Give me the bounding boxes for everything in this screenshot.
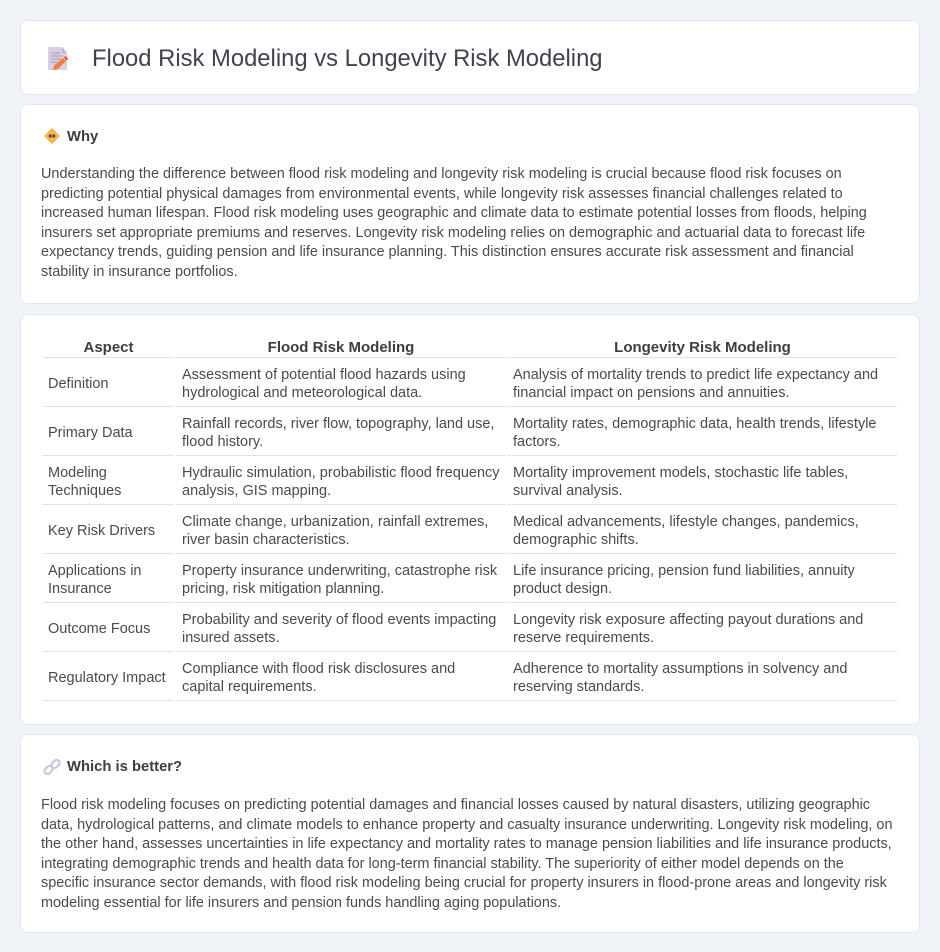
comparison table: Probability and severity of flood events impacting: [182, 612, 496, 628]
comparison table: Adherence to mortality assumptions in solvency and: [513, 661, 847, 677]
comparison table: analysis, GIS mapping.: [182, 483, 331, 499]
panel: which is better: [20, 734, 920, 933]
comparison table: Regulatory Impact: [48, 670, 166, 686]
comparison table: Longevity Risk Modeling: [614, 339, 791, 356]
comparison table: product design.: [513, 581, 612, 597]
text block: why explanation: [41, 166, 867, 280]
comparison table: reserving standards.: [513, 679, 644, 695]
comparison table: Insurance: [48, 581, 112, 597]
text block: why explanation: Understanding the difference between flood risk modeling and longevity risk modeling is crucial because flood risk focuses on: [41, 166, 842, 182]
comparison table: reserve requirements.: [513, 630, 654, 646]
heading: which is better: Which is better?: [67, 759, 182, 775]
comparison table: Flood Risk Modeling: [268, 339, 414, 356]
text block: verdict: the other hand, assesses uncertainties in life expectancy and mortality rates to manage pension liabilities and life insurance products,: [41, 836, 892, 852]
comparison table: Rainfall records, river flow, topography, land use,: [182, 416, 494, 432]
comparison table: Outcome Focus: [48, 621, 150, 637]
text block: why explanation: insurers set appropriate premiums and reserves. Longevity risk modeling relies on demographic and actuarial data to forecast life: [41, 225, 865, 241]
comparison table: Life insurance pricing, pension fund liabilities, annuity: [513, 563, 855, 579]
comparison table: insured assets.: [182, 630, 280, 646]
comparison table: pricing, risk mitigation planning.: [182, 581, 384, 597]
panel: comparison table: [20, 314, 920, 725]
comparison table: Hydraulic simulation, probabilistic flood frequency: [182, 465, 500, 481]
comparison table: Analysis of mortality trends to predict life expectancy and: [513, 367, 878, 383]
text block: why explanation: stability in insurance portfolios.: [41, 264, 238, 280]
icon: document with pencil: [48, 47, 68, 70]
text block: why explanation: expectancy trends, guiding pension and life insurance planning. This distinction ensures accurate risk assessment and financial: [41, 244, 854, 260]
comparison table: demographic shifts.: [513, 532, 639, 548]
comparison table: Compliance with flood risk disclosures and: [182, 661, 455, 677]
comparison table: [43, 339, 897, 701]
comparison table: Techniques: [48, 483, 121, 499]
comparison table: Definition: [48, 376, 108, 392]
comparison table: survival analysis.: [513, 483, 623, 499]
comparison table: Mortality rates, demographic data, health trends, lifestyle: [513, 416, 876, 432]
comparison table: Mortality improvement models, stochastic life tables,: [513, 465, 848, 481]
panel: why: [20, 104, 920, 304]
text block: verdict: data, hydrological patterns, and climate models to enhance property and casualty insurance underwriting. Longevity risk modeling, on: [41, 816, 892, 832]
comparison table: Medical advancements, lifestyle changes, pandemics,: [513, 514, 859, 530]
text block: verdict: Flood risk modeling focuses on predicting potential damages and financial losses caused by natural disasters, utilizing geographic: [41, 797, 870, 813]
text block: verdict: modeling essential for life insurers and pension funds handling aging populations.: [41, 894, 561, 910]
heading: why: Why: [67, 129, 98, 145]
text block: verdict: specific insurance sector demands, with flood risk modeling being crucial for property insurers in flood-prone areas and longevity risk: [41, 875, 887, 891]
comparison table: Property insurance underwriting, catastrophe risk: [182, 563, 497, 579]
text block: why explanation: increased human lifespan. Flood risk modeling uses geographic and climate data to estimate potential losses from floods, helping: [41, 205, 867, 221]
comparison table: financial impact on pensions and annuities.: [513, 385, 789, 401]
comparison table: Assessment of potential flood hazards using: [182, 367, 466, 383]
comparison table: Primary Data: [48, 425, 133, 441]
title: Flood Risk Modeling vs Longevity Risk Modeling: [92, 45, 603, 72]
text block: verdict: [41, 797, 892, 910]
comparison table: Aspect: [83, 339, 134, 356]
comparison table: flood history.: [182, 434, 263, 450]
icon: warning diamond: [44, 128, 60, 144]
text block: why explanation: predicting potential physical damages from environmental events, while longevity risk assesses financial challenges related to: [41, 186, 843, 202]
comparison table: river basin characteristics.: [182, 532, 350, 548]
panel: title card: [20, 20, 920, 95]
comparison table: Climate change, urbanization, rainfall extremes,: [182, 514, 488, 530]
icon: chain link: [43, 758, 61, 776]
comparison table: factors.: [513, 434, 561, 450]
text block: verdict: integrating demographic trends and health data for long-term financial stability. The superiority of either model depends on the: [41, 856, 844, 872]
comparison table: Applications in: [48, 563, 142, 579]
comparison table: Key Risk Drivers: [48, 523, 155, 539]
comparison table: Longevity risk exposure affecting payout durations and: [513, 612, 863, 628]
comparison table: capital requirements.: [182, 679, 317, 695]
comparison table: hydrological and meteorological data.: [182, 385, 422, 401]
comparison table: Modeling: [48, 465, 107, 481]
